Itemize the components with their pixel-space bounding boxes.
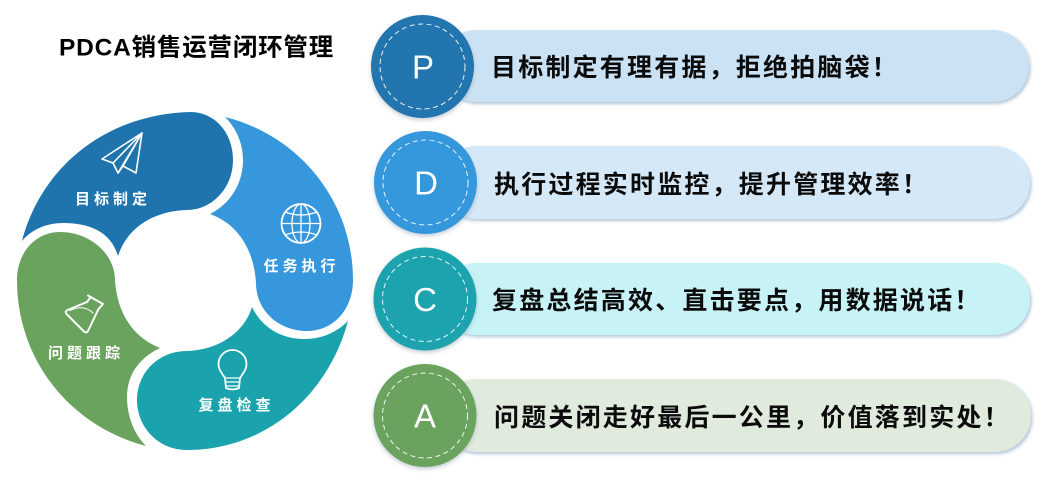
label: 任务执行: 任务执行 [263, 257, 340, 275]
label: 复盘检查: 复盘检查 [198, 396, 275, 414]
badge A: A [414, 398, 436, 434]
icon: flask [66, 296, 103, 332]
label: 问题跟踪: 问题跟踪 [48, 344, 124, 362]
icon: light bulb [218, 350, 246, 390]
badge P: P [412, 48, 434, 86]
segment: 任务执行 [210, 117, 353, 331]
text: 目标制定有理有据，拒绝拍脑袋！ [491, 54, 899, 82]
badge P [371, 15, 474, 118]
segment: 问题跟踪 [17, 232, 160, 446]
segment: 目标制定 [22, 112, 233, 256]
badge C: C [413, 281, 437, 318]
pill [440, 146, 1030, 219]
badge D [374, 131, 477, 234]
row C [374, 248, 1030, 350]
badge D: D [414, 164, 438, 202]
badge A [374, 364, 476, 467]
pill [440, 30, 1029, 102]
label: 目标制定: 目标制定 [75, 190, 151, 208]
pill [440, 263, 1030, 335]
cycle diagram [17, 112, 353, 450]
segment: 复盘检查 [137, 307, 348, 450]
row D [374, 131, 1030, 234]
text: 复盘总结高效、直击要点，用数据说话！ [492, 287, 982, 315]
row A [374, 364, 1031, 467]
icon: globe [282, 204, 320, 243]
icon: paper plane [102, 133, 142, 173]
text: 问题关闭走好最后一公里，价值落到实处！ [494, 404, 1011, 432]
pill [440, 379, 1031, 452]
text: 执行过程实时监控，提升管理效率！ [494, 171, 929, 199]
badge C [374, 248, 476, 350]
title: PDCA销售运营闭环管理 [59, 34, 334, 62]
row P [371, 15, 1029, 118]
